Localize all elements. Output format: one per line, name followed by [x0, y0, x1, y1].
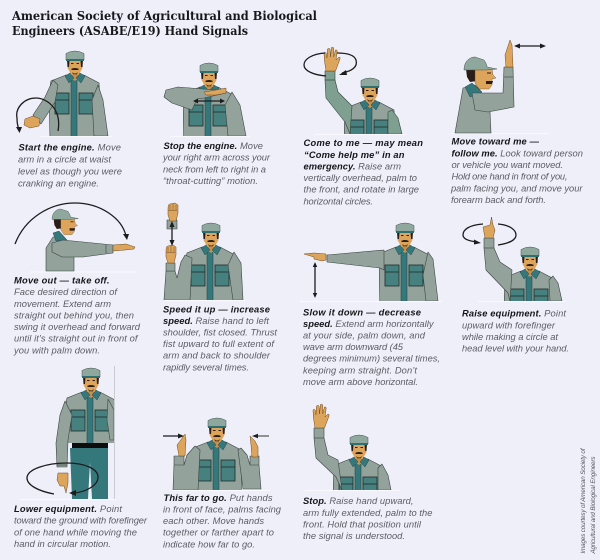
caption: slow it down: wave arm downward (45 — [303, 342, 404, 352]
caption: come to me: the front, and rotate in large — [304, 185, 419, 195]
arrow: left inward — [163, 434, 184, 438]
caption: stop the engine: “throat-cutting” motion. — [163, 176, 258, 186]
caption: raise equipment: while making a circle at — [462, 332, 558, 342]
caption: slow it down: speed. Extend arm horizontally — [303, 319, 435, 329]
panel: slow it down — [303, 223, 440, 387]
figure: this far to go — [172, 418, 262, 490]
caption: stop the engine: Stop the engine. Move — [164, 141, 263, 151]
image credit: Images courtesy of American Society of — [580, 447, 587, 554]
caption: move toward me: follow me. Look toward person — [452, 149, 583, 159]
caption: this far to go — [163, 493, 282, 549]
title: American Society of Agricultural and Biological — [11, 8, 317, 23]
figure: stop the engine — [164, 62, 246, 136]
caption: start the engine: cranking an engine. — [18, 178, 99, 188]
figure: move toward me — [455, 40, 514, 133]
panel: move toward me — [450, 40, 583, 205]
caption: come to me: horizontal circles. — [304, 196, 373, 206]
arrow: wave downward — [313, 262, 317, 298]
caption: move toward me: Move toward me — — [452, 137, 540, 147]
arrow: ground circle — [27, 463, 98, 496]
panel: this far to go — [163, 418, 282, 549]
caption: move toward me: Hold one hand in front of you, — [452, 172, 568, 182]
caption: raise equipment: Raise equipment. Point — [462, 309, 566, 319]
caption: start the engine: arm in a circle at waist — [18, 154, 111, 164]
caption: come to me: Come to me — may mean — [304, 138, 423, 148]
caption: lower equipment: Lower equipment. Point — [14, 504, 122, 514]
panel: move out — [13, 203, 141, 356]
caption: stop the engine — [162, 141, 271, 186]
panel: lower equipment — [14, 366, 148, 549]
caption: stop the engine: neck from left to right in a — [163, 164, 266, 174]
figure: start the engine — [24, 51, 108, 145]
panel: come to me — [304, 47, 423, 206]
arrow: up and down — [170, 221, 174, 246]
caption: stop: the signal is understood. — [303, 531, 405, 541]
caption: come to me: emergency. Raise arm — [304, 162, 401, 172]
figure: raise equipment — [482, 217, 562, 301]
caption: come to me: vertically overhead, palm to — [304, 173, 417, 183]
panel: raise equipment — [462, 217, 569, 354]
caption: start the engine — [18, 142, 122, 188]
caption: move out: until it’s straight out in front of — [14, 334, 139, 344]
image credit — [580, 447, 597, 554]
arrow: throat cut — [193, 98, 225, 104]
figure: slow it down — [304, 222, 438, 301]
caption: start the engine: level as though you were — [18, 166, 122, 176]
title — [11, 8, 317, 38]
caption: stop: front. Hold that position until — [303, 519, 422, 529]
caption: move toward me: forearm back and forth. — [451, 195, 546, 205]
caption: this far to go: each other. Move hands — [163, 516, 264, 526]
caption: raise equipment: upward with forefinger — [462, 320, 556, 330]
image credit: Agricultural and Biological Engineers — [590, 456, 597, 554]
caption: move out: you with palm down. — [13, 346, 100, 356]
panel: stop the engine — [162, 63, 271, 186]
caption: move out: swing it overhead and forward — [14, 322, 141, 332]
caption: start the engine: Start the engine. Move — [18, 142, 121, 152]
figure: move out — [46, 209, 135, 271]
caption: move toward me: or vehicle you want moved. — [452, 160, 563, 170]
caption: lower equipment: of one hand while moving the — [14, 527, 137, 537]
figure: stop — [312, 404, 392, 490]
caption: speed it up: shoulder, fist closed. Thrust — [163, 328, 277, 338]
caption: come to me — [304, 138, 423, 206]
caption: speed it up: Speed it up — increase — [163, 304, 270, 314]
caption: slow it down: at your side, palm down, and — [303, 330, 426, 340]
arrow: back and forth — [514, 44, 546, 48]
caption: speed it up: arm and back to shoulder — [163, 351, 271, 361]
figure: speed it up — [164, 202, 244, 300]
caption: slow it down: keeping arm straight. Don’t — [303, 365, 417, 375]
caption: slow it down: Slow it down — decrease — [303, 307, 421, 317]
panel: speed it up — [163, 203, 277, 372]
figure: come to me — [324, 46, 402, 134]
caption: this far to go: together or farther apart to — [163, 528, 274, 538]
arrow: overhead circle — [304, 53, 356, 76]
caption: move out: movement. Extend arm — [14, 299, 111, 309]
caption: stop: Stop. Raise hand upward, — [303, 496, 414, 506]
figure: lower equipment — [56, 366, 116, 499]
title: Engineers (ASABE/E19) Hand Signals — [12, 23, 248, 38]
caption: move out — [13, 275, 141, 356]
caption: raise equipment — [462, 309, 569, 354]
caption: stop — [303, 496, 432, 541]
caption: speed it up: fist upward to full extent of — [163, 339, 275, 349]
arrow: head-level circle — [463, 224, 516, 245]
panel: stop — [303, 404, 432, 541]
caption: come to me: “Come help me” in an — [304, 150, 405, 160]
caption: stop: arm fully extended, palm to the — [303, 508, 432, 518]
arrow: waist circle — [16, 98, 59, 133]
caption: move toward me: palm facing you, and move your — [450, 183, 583, 193]
caption: stop the engine: your right arm across your — [162, 152, 271, 162]
caption: slow it down: degrees minimum) several times, — [303, 354, 440, 364]
caption: this far to go: in front of face, palms facing — [163, 505, 282, 515]
caption: this far to go: This far to go. Put hands — [164, 493, 273, 503]
caption: move out: Face desired direction of — [14, 287, 118, 297]
caption: lower equipment — [14, 504, 148, 549]
arrow: right inward — [252, 434, 269, 438]
panel: start the engine — [16, 51, 122, 188]
caption: raise equipment: head level with your hand. — [462, 344, 569, 354]
caption: this far to go: indicate how far to go. — [163, 539, 255, 549]
arrow: overhead swing — [15, 203, 129, 244]
caption: move toward me — [450, 137, 583, 205]
caption: speed it up — [163, 304, 277, 372]
caption: move out: Move out — take off. — [14, 275, 110, 285]
caption: move out: straight out behind you, then — [14, 310, 134, 320]
caption: speed it up: rapidly several times. — [163, 362, 249, 372]
caption: speed it up: speed. Raise hand to left — [163, 316, 269, 326]
caption: lower equipment: toward the ground with forefinger — [14, 516, 148, 526]
caption: slow it down: move arm above horizontal. — [303, 377, 418, 387]
caption: lower equipment: hand in circular motion. — [14, 539, 111, 549]
caption: slow it down — [303, 307, 440, 387]
